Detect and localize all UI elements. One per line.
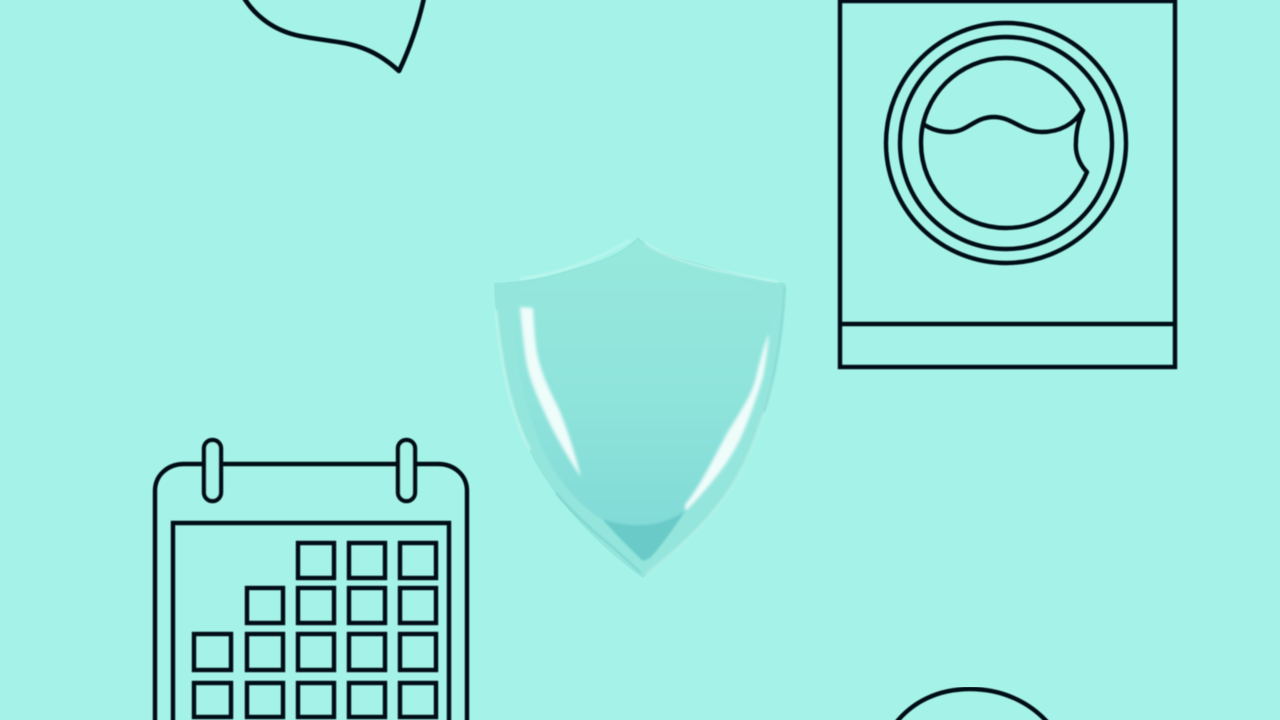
icon: calendar xyxy=(155,440,467,720)
right outer dark rim xyxy=(764,286,785,412)
washing machine body xyxy=(840,1,1175,367)
shield outer glass xyxy=(494,237,785,578)
shield bottom shade xyxy=(603,512,684,561)
right binder ring xyxy=(398,440,415,501)
water line xyxy=(923,110,1083,132)
calendar inner frame xyxy=(173,523,449,720)
outer lower right rim xyxy=(646,378,774,574)
drum with notch xyxy=(921,58,1087,228)
outer left rim light xyxy=(496,310,530,450)
left binder ring xyxy=(204,440,221,501)
icon: washing machine xyxy=(840,1,1175,367)
top rim light xyxy=(520,240,778,282)
right edge highlight xyxy=(685,333,769,511)
calendar day grid xyxy=(194,543,436,717)
middle door ring xyxy=(900,37,1112,249)
outer door ring xyxy=(886,23,1126,263)
icon: shield xyxy=(494,237,785,578)
icon: speech bubble xyxy=(244,0,424,71)
shield inner body xyxy=(512,241,774,560)
lower left dark rim xyxy=(556,493,641,573)
washing machine base line xyxy=(840,322,1175,326)
calendar outline xyxy=(155,464,467,720)
left edge highlight xyxy=(520,307,581,477)
icon: partial circle at bottom xyxy=(895,689,1049,720)
